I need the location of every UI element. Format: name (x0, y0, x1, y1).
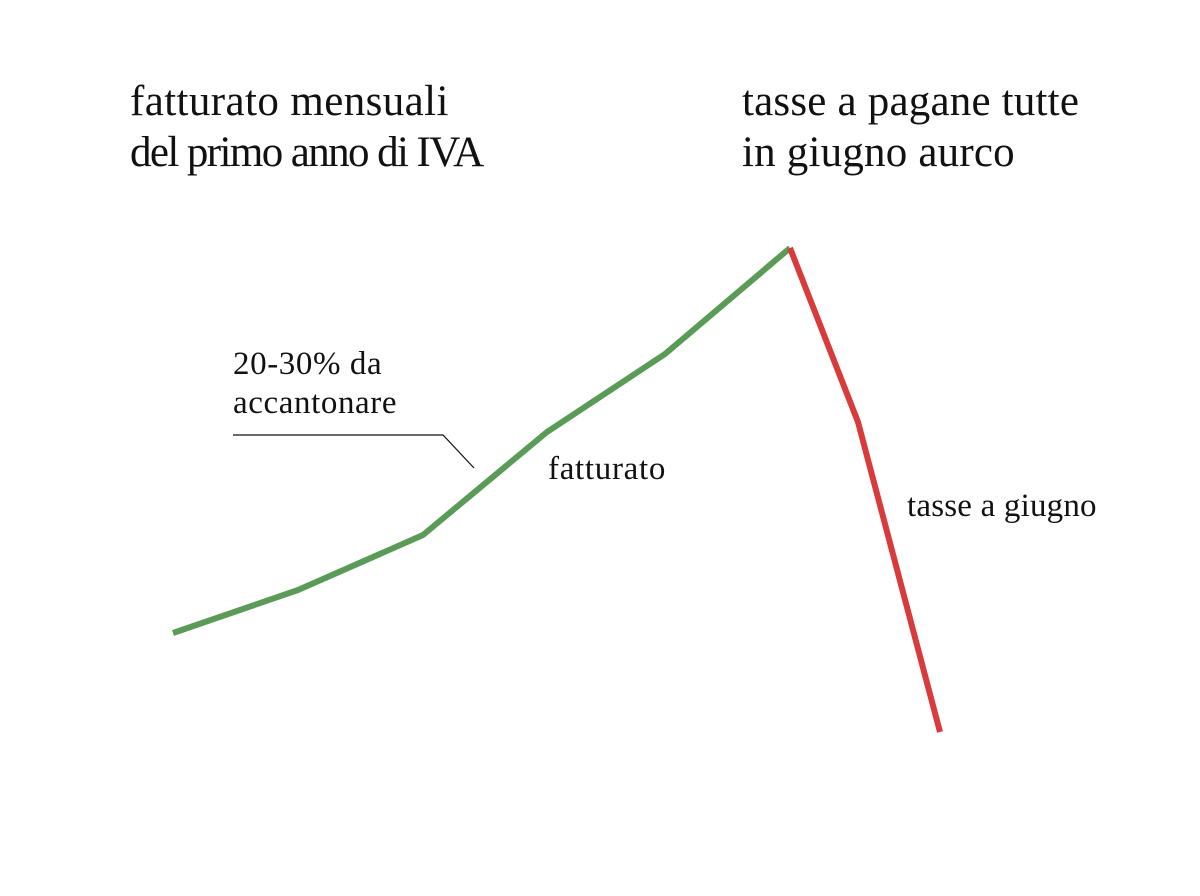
title: left: del primo anno di IVA (130, 129, 483, 176)
label: fatturato: fatturato (548, 451, 666, 487)
annotation leader line (233, 435, 474, 468)
title: right: in giugno aurco (742, 129, 1015, 176)
annotation: 20-30% da accantonare (233, 346, 397, 421)
title: right (742, 78, 1079, 176)
title: left (130, 78, 484, 176)
annotation: 20-30% da accantonare: accantonare (233, 385, 397, 421)
annotation: 20-30% da accantonare: 20-30% da (233, 346, 382, 382)
title: left: fatturato mensuali (130, 78, 449, 125)
red taxes line (790, 248, 940, 732)
label: tasse a giugno: tasse a giugno (907, 488, 1097, 524)
title: right: tasse a pagane tutte (742, 78, 1079, 125)
green revenue line (173, 248, 790, 633)
